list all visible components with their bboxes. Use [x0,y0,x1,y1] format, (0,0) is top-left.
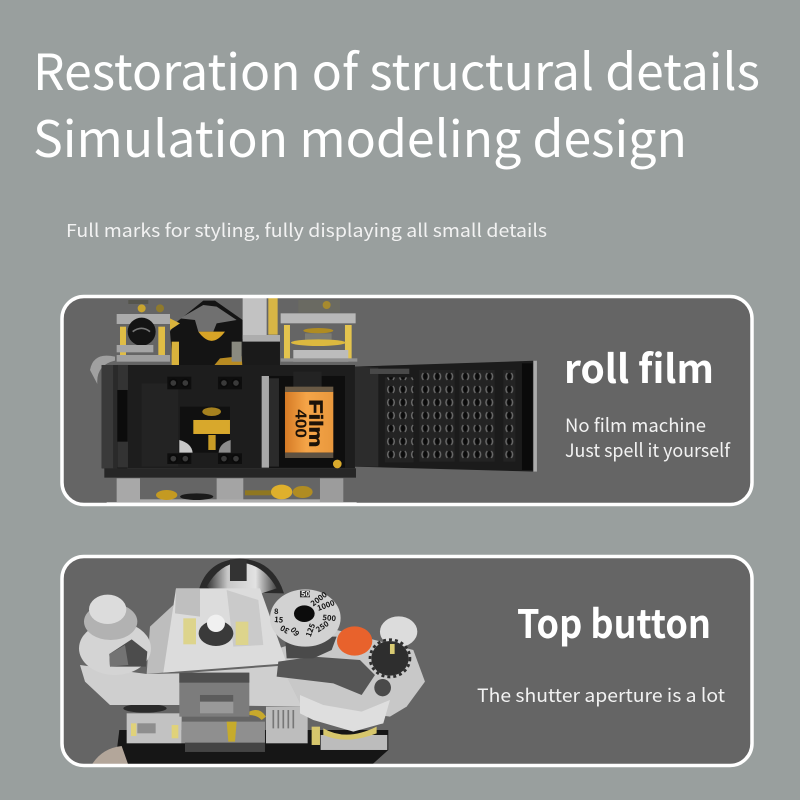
top mechanisms [170,301,243,372]
illustration: open camera back with film roll [90,297,537,506]
left turret [117,314,170,324]
shutter speed dial: 15 [274,614,284,626]
shutter speed dial: 2000 [308,589,330,609]
panel: roll film [62,296,752,506]
shutter speed dial: 250 [314,618,332,635]
lower body [115,730,388,765]
text block: roll film description: No film machine [565,412,706,438]
shutter speed dial: 60 [288,624,302,638]
film chamber [262,376,345,468]
shutter speed dial: 8 [274,606,279,617]
shutter speed dial: 125 [303,621,318,638]
body studs [167,377,242,464]
plate [80,663,313,707]
orange shutter button [337,626,372,656]
finder [179,673,249,717]
lever [277,657,375,695]
left hook [90,356,115,384]
illustration: open camera back with film roll: Film [305,399,326,447]
lens behind [198,559,284,593]
camera body [102,365,355,468]
text block: roll film description [565,412,731,463]
shutter speed dial: 50 [301,589,310,600]
film roll [285,392,333,453]
bottom parts [117,478,140,503]
title: Restoration of structural details [33,33,760,105]
dial shadow [285,637,337,658]
text block: roll film description: Just spell it yourself [565,437,731,463]
front wedge [300,695,390,732]
right turret [281,313,356,323]
subtitle: Full marks for styling, fully displaying all small details [66,217,547,243]
illustration: open camera back with film roll: 400 [291,409,308,438]
panel: top button [62,556,752,766]
heading: roll film: roll film [564,339,714,395]
right knob and gear [370,616,417,696]
prism [163,588,287,673]
panel border [62,556,752,766]
illustration: camera top plate with dials [79,559,425,765]
shutter speed dial [270,589,341,647]
title: Simulation modeling design [33,100,687,172]
shutter speed dial: 500 [322,612,337,624]
lower mechanisms [127,713,182,743]
title [33,33,760,172]
heading: top button: Top button [517,594,711,650]
open door [355,361,537,472]
left dial [79,626,151,672]
shutter speed dial: 30 [278,622,291,636]
panel border [62,296,752,504]
window with gears [180,407,230,453]
shutter speed dial: 1000 [316,597,337,614]
text block: top button description: The shutter aperture is a lot [477,682,725,708]
